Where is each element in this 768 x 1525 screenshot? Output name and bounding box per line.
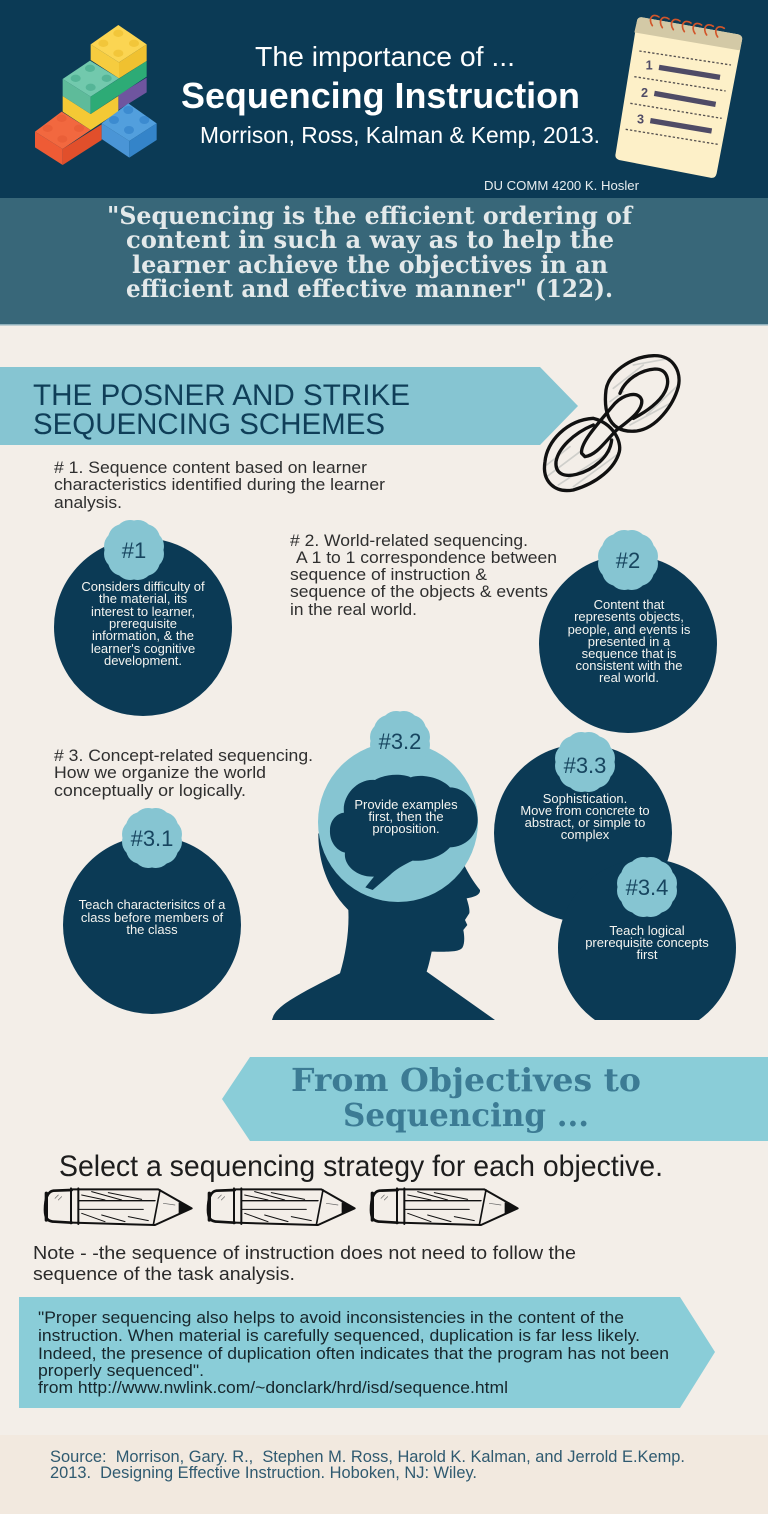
circle: #1: interest to learner, [91, 604, 195, 619]
circle: #2: sequence that is [582, 646, 677, 661]
circle: #3.1: Teach characterisitcs of a [79, 897, 226, 912]
text: scheme 2: sequence of instruction & [290, 565, 488, 584]
figure: head silhouette #3.2: proposition. [372, 821, 440, 836]
circle: #2: presented in a [588, 634, 671, 649]
text: scheme 1: analysis. [54, 493, 122, 512]
title: the importance of: The importance of ... [255, 41, 515, 72]
circle: #3.4: prerequisite concepts [585, 935, 709, 950]
text: scheme 1 [54, 458, 385, 512]
text: scheme 3: conceptually or logically. [54, 781, 246, 800]
text: scheme 2: # 2. World-related sequencing. [290, 531, 528, 550]
icon: lego bricks [35, 25, 157, 165]
panel: source footer: Source: Morrison, Gary. R., Stephen M. Ross, Harold K. Kalman, and Jerrold E.Kemp. [50, 1448, 685, 1466]
circle: #3.3 [494, 732, 672, 922]
text: note: Note - -the sequence of instruction does not need to follow the [33, 1242, 576, 1263]
panel: definition quote: "Sequencing is the efficient ordering of [107, 201, 634, 230]
icon: chain link [544, 356, 679, 491]
circle: #3.4: first [637, 947, 658, 962]
circle: #3.4 [558, 857, 736, 1020]
text: note [33, 1242, 576, 1284]
circle: #3.3: abstract, or simple to [525, 815, 645, 830]
circle: #1: prerequisite [109, 616, 177, 631]
text: scheme 1: # 1. Sequence content based on learner [54, 458, 367, 477]
circle: #2: real world. [599, 670, 659, 685]
badge: #2 [598, 530, 658, 590]
figure: head silhouette #3.2: Provide examples [354, 797, 458, 812]
panel: definition quote: efficient and effective manner" (122). [126, 274, 613, 303]
icon: pencil 2 [208, 1188, 355, 1225]
text: scheme 3: # 3. Concept-related sequencing. [54, 746, 313, 765]
figure: head silhouette #3.2 [272, 711, 495, 1020]
callout: quotation: properly sequenced". [38, 1361, 204, 1380]
circle: #1 [54, 520, 232, 716]
banner: from objectives to sequencing [222, 1057, 768, 1141]
banner: Posner and Strike [0, 367, 578, 445]
circle: #2: Content that [594, 597, 665, 612]
title: sequencing instruction: Sequencing Instruction [181, 75, 580, 116]
badge: #3.4 [617, 857, 677, 917]
banner: from objectives to sequencing: Sequencing ... [343, 1096, 589, 1134]
panel: header [0, 0, 768, 198]
text: scheme 1: characteristics identified during the learner [54, 475, 385, 494]
icon: notepad: 2 [641, 86, 648, 100]
circle: #3.3: Sophistication. [543, 791, 627, 806]
panel: definition quote [0, 198, 768, 326]
text: scheme 3: How we organize the world [54, 763, 266, 782]
icon: notepad [615, 15, 742, 178]
circle: #2: consistent with the [576, 658, 682, 673]
callout: quotation [19, 1297, 715, 1408]
circle: #1: learner's cognitive [91, 641, 195, 656]
circle: #3.4: Teach logical [609, 923, 685, 938]
credit: DU COMM 4200 K. Hosler [484, 179, 639, 193]
circle: #3.3: Move from concrete to [520, 803, 650, 818]
panel: source footer [0, 1435, 768, 1514]
figure: head silhouette #3.2: first, then the [368, 809, 444, 824]
badge: #1 [104, 520, 164, 580]
circle: #1: the material, its [99, 591, 188, 606]
subtitle: authors: Morrison, Ross, Kalman & Kemp, 2013. [200, 122, 600, 148]
badge: #3.4: #3.4 [626, 875, 668, 900]
panel: definition quote: content in such a way as to help the [126, 225, 614, 254]
text: scheme 2: in the real world. [290, 600, 417, 619]
icon: pencil 1 [45, 1188, 192, 1225]
badge: #3.2 [370, 711, 430, 771]
badge: #3.3: #3.3 [564, 753, 606, 778]
circle: #2: represents objects, [574, 609, 684, 624]
text: scheme 2 [290, 531, 557, 619]
circle: #3.1 [63, 808, 241, 1014]
badge: #1: #1 [122, 538, 146, 563]
callout: quotation: "Proper sequencing also helps to avoid inconsistencies in the content of the [38, 1308, 624, 1327]
text: scheme 2: A 1 to 1 correspondence between [296, 548, 557, 567]
heading: select a strategy: Select a sequencing strategy for each objective. [59, 1150, 663, 1183]
text: scheme 3 [54, 746, 313, 800]
circle: #3.1: class before members of [81, 910, 224, 925]
badge: #3.1: #3.1 [131, 826, 173, 851]
panel: definition quote: learner achieve the objectives in an [132, 250, 608, 279]
callout: quotation: Indeed, the presence of duplication often indicates that the program has not been [38, 1344, 669, 1363]
badge: #3.1 [122, 808, 182, 868]
circle: #2 [539, 530, 717, 733]
callout: quotation: from http://www.nwlink.com/~donclark/hrd/isd/sequence.html [38, 1378, 508, 1397]
circle: #2: people, and events is [568, 622, 691, 637]
badge: #3.3 [555, 732, 615, 792]
icon: notepad: 1 [646, 59, 653, 73]
icon: notepad: 3 [637, 113, 644, 127]
circle: #1: development. [104, 653, 182, 668]
circle: #1: Considers difficulty of [81, 579, 205, 594]
badge: #3.2: #3.2 [379, 729, 421, 754]
banner: Posner and Strike: SEQUENCING SCHEMES [33, 408, 385, 441]
text: note: sequence of the task analysis. [33, 1263, 295, 1284]
banner: from objectives to sequencing: From Objectives to [291, 1061, 641, 1099]
panel: source footer: 2013. Designing Effective Instruction. Hoboken, NJ: Wiley. [50, 1464, 477, 1482]
banner: Posner and Strike: THE POSNER AND STRIKE [33, 379, 410, 412]
circle: #3.1: the class [126, 922, 178, 937]
callout: quotation: instruction. When material is carefully sequenced, duplication is far less likely. [38, 1326, 640, 1345]
circle: #1: information, & the [92, 628, 194, 643]
text: scheme 2: sequence of the objects & events [290, 582, 548, 601]
badge: #2: #2 [616, 548, 640, 573]
icon: pencil 3 [371, 1188, 518, 1225]
circle: #3.3: complex [561, 827, 610, 842]
